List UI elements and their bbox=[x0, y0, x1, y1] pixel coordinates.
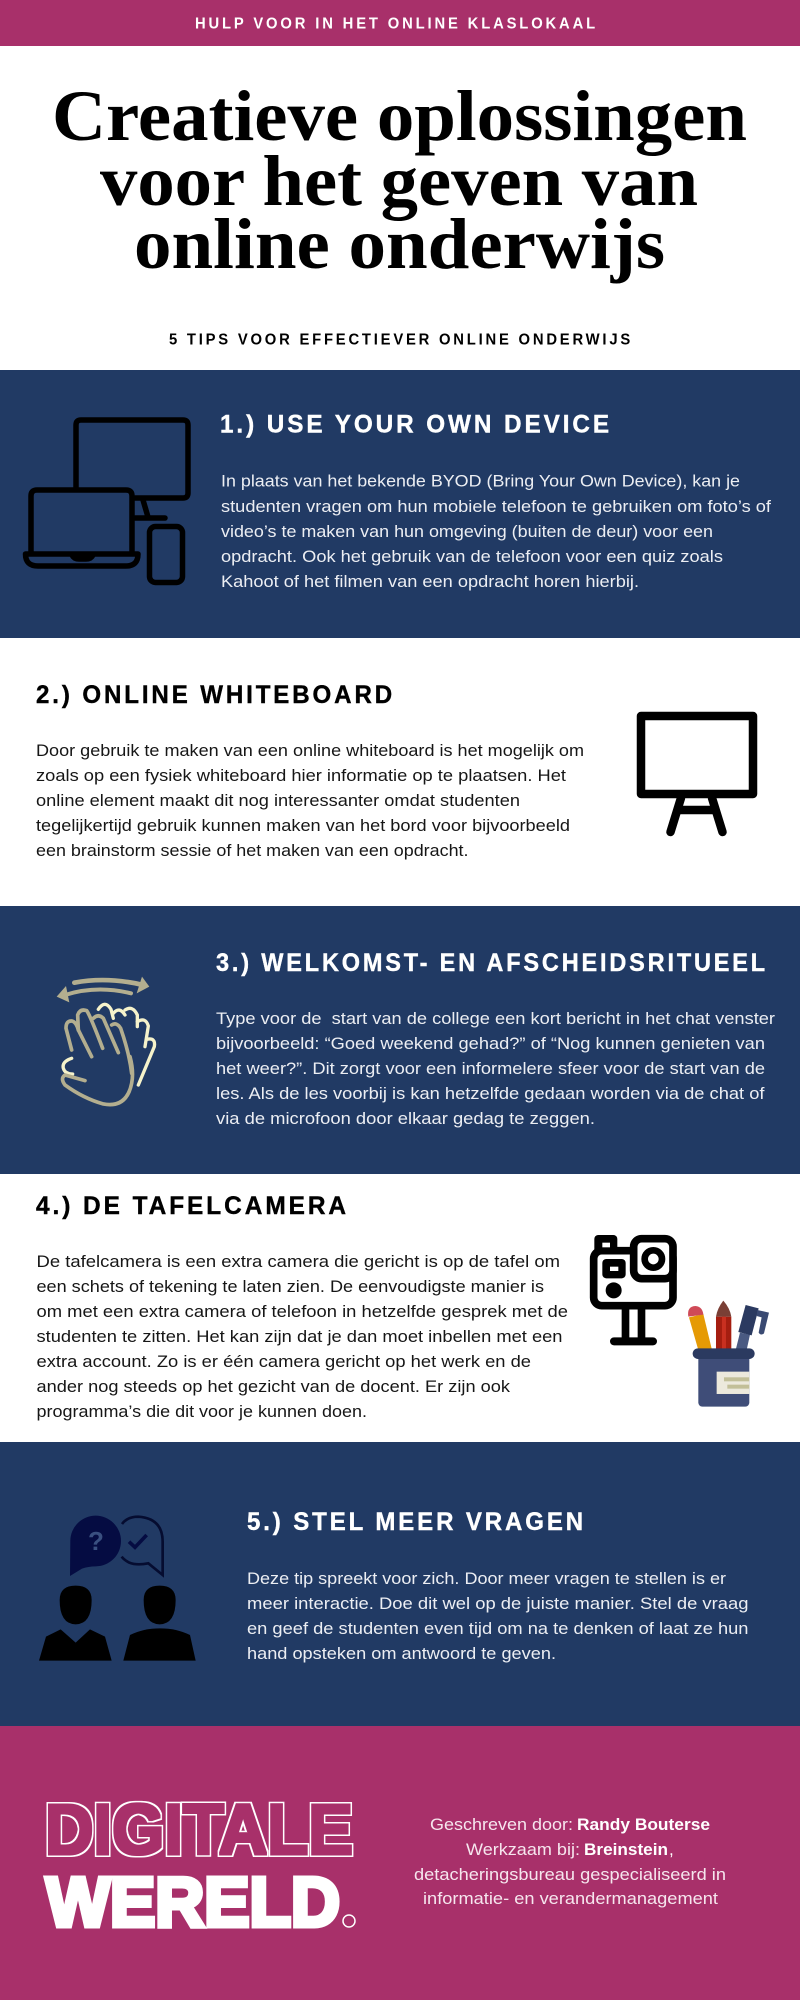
text: tip 4 body: De tafelcamera is een extra camera die gericht is op de tafel om bbox=[36, 1252, 560, 1271]
text: tip 2 body: tegelijkertijd gebruik kunnen maken van het bord voor bijvoorbeeld bbox=[36, 816, 570, 835]
text: tip 5 body: meer interactie. Doe dit wel op de juiste manier. Stel de vraag bbox=[247, 1594, 748, 1613]
text: author credit: Breinstein bbox=[584, 1840, 668, 1859]
text: tip 4 body bbox=[36, 1252, 568, 1421]
text: tip 3 body: Type voor de start van de college een kort bericht in het chat venster bbox=[216, 1009, 775, 1028]
top banner bbox=[0, 0, 800, 46]
text: tip 1 body: Kahoot of het filmen van een opdracht horen hierbij. bbox=[221, 572, 639, 591]
text: tip 2 body: online element maakt dit nog interessanter omdat studenten bbox=[36, 791, 520, 810]
subtitle: 5 TIPS VOOR EFFECTIEVER ONLINE ONDERWIJS bbox=[169, 332, 633, 348]
text: author credit: Geschreven door: bbox=[430, 1815, 573, 1834]
text: tip 5 body: en geef de studenten even tijd om na te denken of laat ze hun bbox=[247, 1619, 748, 1638]
text: author credit bbox=[414, 1815, 726, 1908]
text: tip 4 body: een schets of tekening te laten zien. De eenvoudigste manier is bbox=[36, 1277, 544, 1296]
icon: clapping hands bbox=[57, 977, 155, 1105]
logo: digitale wereld: DIGITALE bbox=[45, 1791, 353, 1870]
text: author credit: informatie- en verandermanagement bbox=[423, 1889, 718, 1908]
icon: two people with question and check bubbles: ? bbox=[88, 1526, 104, 1556]
text: tip 4 body: ander nog steeds op het gezicht van de docent. Er zijn ook bbox=[36, 1377, 511, 1396]
panel: tip 1 use your own device bbox=[0, 370, 800, 638]
heading: tip 4: 4.) DE TAFELCAMERA bbox=[36, 1192, 349, 1220]
panel: tip 2 online whiteboard bbox=[0, 638, 800, 906]
text: author credit: detacheringsbureau gespecialiseerd in bbox=[414, 1865, 726, 1884]
title: online onderwijs bbox=[134, 204, 665, 284]
text: tip 5 body: Deze tip spreekt voor zich. Door meer vragen te stellen is er bbox=[247, 1569, 726, 1588]
text: tip 3 body bbox=[216, 1009, 775, 1128]
logo: digitale wereld: WERELD bbox=[46, 1863, 340, 1941]
text: tip 4 body: programma’s die dit voor je kunnen doen. bbox=[36, 1402, 367, 1421]
text: tip 4 body: om met een extra camera of telefoon in hetzelfde gesprek met de bbox=[36, 1302, 568, 1321]
text: tip 3 body: bijvoorbeeld: “Goed weekend gehad?” of “Nog kunnen genieten van bbox=[216, 1034, 765, 1053]
text: tip 5 body bbox=[247, 1569, 748, 1663]
panel: tip 5 stel meer vragen bbox=[0, 1442, 800, 1726]
text: tip 1 body: studenten vragen om hun mobiele telefoon te gebruiken om foto’s of bbox=[221, 497, 771, 516]
icon: devices bbox=[26, 420, 188, 582]
text: author credit: Randy Bouterse bbox=[577, 1815, 710, 1834]
text: tip 1 body: opdracht. Ook het gebruik van de telefoon voor een quiz zoals bbox=[221, 547, 723, 566]
logo: digitale wereld bbox=[45, 1791, 355, 1941]
icon: two people with question and check bubbles bbox=[39, 1516, 196, 1661]
text: tip 4 body: studenten te zitten. Het kan zijn dat je dan moet inbellen met een bbox=[36, 1327, 562, 1346]
title: voor het geven van bbox=[100, 141, 698, 221]
panel: tip 3 welkomst- en afscheidsritueel bbox=[0, 906, 800, 1174]
text: tip 3 body: les. Als de les voorbij is kan hetzelfde gedaan worden via de chat of bbox=[216, 1084, 765, 1103]
title bbox=[52, 76, 747, 284]
icon: camera on stand bbox=[594, 1235, 673, 1341]
text: tip 3 body: via de microfoon door elkaar gedag te zeggen. bbox=[216, 1109, 595, 1128]
heading: tip 1: 1.) USE YOUR OWN DEVICE bbox=[220, 410, 612, 438]
heading: tip 2: 2.) ONLINE WHITEBOARD bbox=[36, 681, 395, 709]
text: tip 1 body bbox=[221, 472, 771, 591]
icon: whiteboard bbox=[641, 716, 753, 832]
text: author credit: , bbox=[669, 1840, 674, 1859]
text: tip 1 body: video’s te maken van hun omgeving (buiten de deur) voor een bbox=[221, 522, 713, 541]
panel: footer bbox=[0, 1726, 800, 2000]
icon: pencil cup bbox=[688, 1301, 769, 1407]
text: tip 1 body: In plaats van het bekende BYOD (Bring Your Own Device), kan je bbox=[221, 472, 740, 490]
text: tip 4 body: extra account. Zo is er één camera gericht op het werk en de bbox=[36, 1352, 531, 1371]
text: tip 2 body: zoals op een fysiek whiteboard hier informatie op te plaatsen. Het bbox=[36, 766, 566, 785]
heading: tip 5: 5.) STEL MEER VRAGEN bbox=[247, 1508, 586, 1536]
text: tip 2 body bbox=[36, 741, 584, 860]
text: tip 3 body: het weer?”. Dit zorgt voor een informelere sfeer voor de start van de bbox=[216, 1059, 765, 1078]
title: Creatieve oplossingen bbox=[52, 76, 747, 156]
text: tip 2 body: een brainstorm sessie of het maken van een opdracht. bbox=[36, 841, 468, 860]
text: tip 5 body: hand opsteken om antwoord te geven. bbox=[247, 1644, 556, 1663]
text: tip 2 body: Door gebruik te maken van een online whiteboard is het mogelijk om bbox=[36, 741, 584, 760]
panel: tip 4 de tafelcamera bbox=[0, 1174, 800, 1442]
top banner: HULP VOOR IN HET ONLINE KLASLOKAAL bbox=[195, 16, 598, 32]
text: author credit: Werkzaam bij: bbox=[466, 1840, 580, 1859]
heading: tip 3: 3.) WELKOMST- EN AFSCHEIDSRITUEEL bbox=[216, 949, 768, 977]
